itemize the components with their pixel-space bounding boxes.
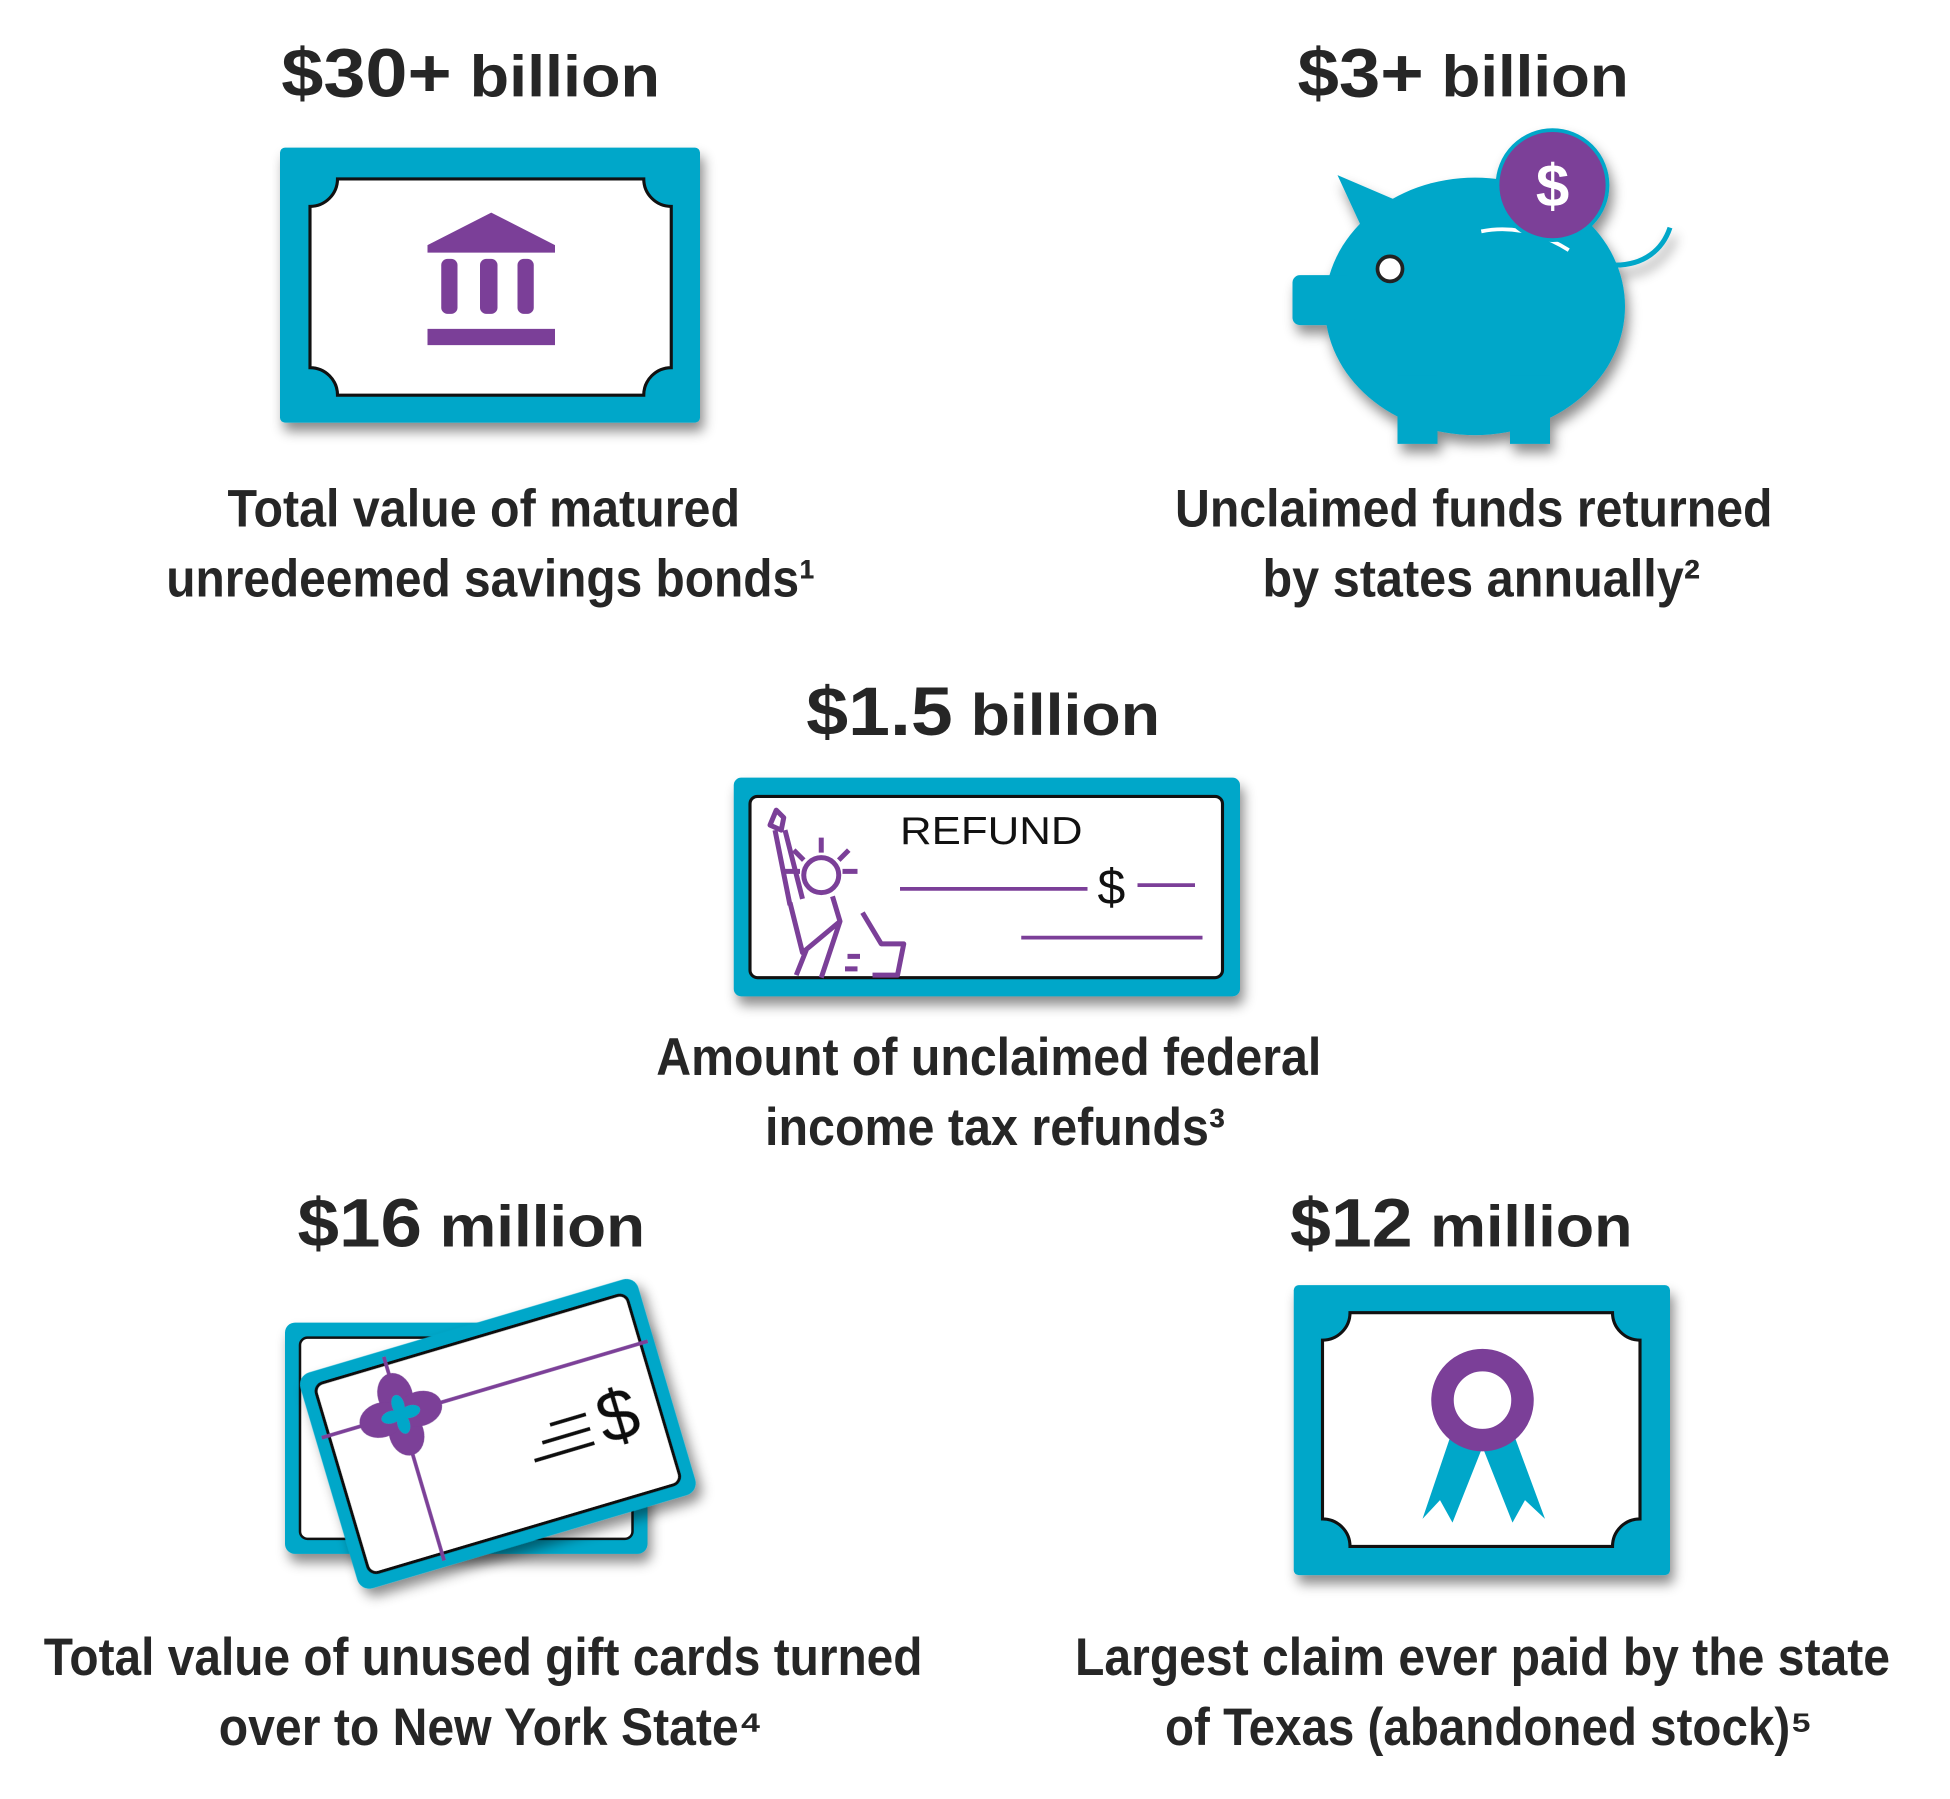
caption: gift cards (44, 1628, 922, 1757)
icon: savings bond (280, 148, 700, 423)
icon: refund check (734, 778, 1240, 996)
caption: savings bonds: unredeemed savings bonds¹ (166, 549, 815, 608)
title: $12 million: $12 million (1290, 1184, 1632, 1261)
icon: statue of liberty (770, 810, 904, 978)
caption: unclaimed funds: Unclaimed funds returned (1175, 479, 1772, 538)
icon: refund check: $ (1098, 859, 1125, 915)
caption: unclaimed funds: by states annually² (1262, 549, 1700, 608)
caption: unclaimed funds (1175, 479, 1772, 608)
caption: gift cards: Total value of unused gift cards turned (44, 1628, 922, 1687)
caption: tax refunds (656, 1028, 1321, 1157)
caption: largest claim: Largest claim ever paid by the state (1075, 1628, 1890, 1687)
icon: piggy bank: $ (1536, 152, 1569, 219)
caption: gift cards: over to New York State⁴ (219, 1698, 762, 1757)
caption: largest claim: of Texas (abandoned stock)⁵ (1165, 1698, 1812, 1757)
icon: refund check: REFUND (900, 810, 1082, 853)
icon: stock certificate (1294, 1285, 1670, 1575)
icon: gift cards (285, 1276, 699, 1592)
caption: tax refunds: Amount of unclaimed federal (656, 1028, 1321, 1087)
title: $30+ billion: $30+ billion (281, 34, 660, 111)
caption: tax refunds: income tax refunds³ (765, 1098, 1225, 1157)
caption: savings bonds (166, 479, 815, 608)
title: $3+ billion: $3+ billion (1298, 34, 1629, 111)
caption: savings bonds: Total value of matured (228, 479, 740, 538)
title: $16 million: $16 million (298, 1184, 645, 1261)
title: $1.5 billion: $1.5 billion (806, 673, 1160, 750)
icon: piggy bank (1292, 130, 1670, 444)
icon: gift cards: $ (587, 1371, 649, 1460)
caption: largest claim (1075, 1628, 1890, 1757)
